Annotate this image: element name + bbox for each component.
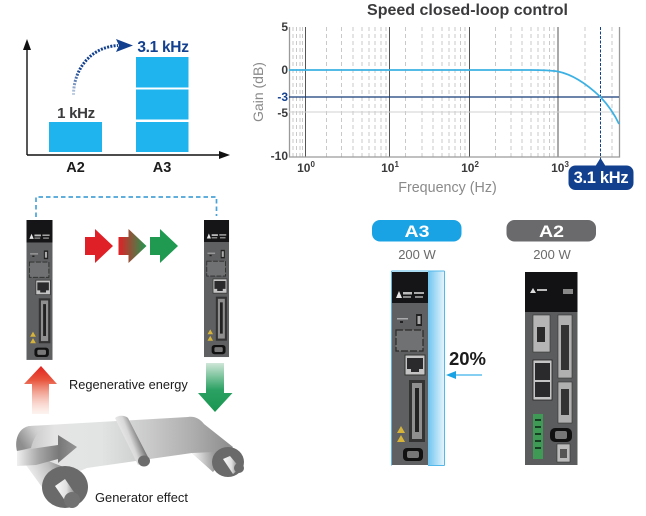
y axis labels — [271, 20, 288, 163]
diagram: regenerative energy — [16, 197, 244, 508]
badge: A3 — [372, 220, 462, 242]
lower right belt section — [192, 452, 214, 472]
minor grid lines — [293, 27, 612, 157]
bar: A2 — [49, 122, 102, 152]
y axis labels: -3 — [277, 90, 288, 104]
x axis labels: 10 — [461, 161, 474, 175]
label: Regenerative energy: Regenerative energy — [69, 377, 188, 392]
drive: A2 — [525, 272, 578, 465]
x axis labels: 10 — [551, 161, 564, 175]
panel: A3 drive — [372, 220, 486, 466]
line chart: Speed closed-loop control — [250, 2, 634, 196]
major grid lines — [306, 27, 470, 157]
x axis labels: 0 — [310, 160, 315, 169]
drive: right — [204, 220, 229, 357]
middle roller — [115, 416, 150, 466]
arrow: dotted curve — [74, 39, 133, 95]
x axis arrowhead — [219, 151, 230, 159]
right roller — [212, 447, 244, 477]
badge: A2: A2 — [539, 222, 564, 241]
y axis arrowhead — [23, 39, 31, 50]
label: 3.1 kHz: 3.1 kHz — [137, 39, 189, 56]
bars: A3 stack — [136, 57, 188, 152]
label: Generator effect: Generator effect — [95, 490, 188, 505]
x axis labels: 2 — [474, 160, 479, 169]
drive: left — [26, 220, 52, 360]
y axis title: Gain (dB) — [250, 62, 266, 122]
arrow: up red — [24, 366, 57, 414]
y axis labels: 0 — [281, 63, 288, 77]
y axis arrow — [26, 46, 28, 155]
y axis labels: -5 — [277, 106, 288, 120]
lower left belt section — [17, 453, 66, 487]
gain curve — [289, 70, 619, 124]
x axis labels — [297, 160, 569, 175]
y axis labels: -10 — [271, 149, 288, 163]
chart title: Speed closed-loop control — [367, 2, 568, 19]
x axis arrow — [27, 154, 222, 156]
left shoulder shading — [16, 425, 46, 451]
label: 20%: 20% — [449, 348, 486, 369]
label: 1 kHz: 1 kHz — [57, 105, 95, 122]
-3 dB line — [289, 96, 619, 98]
badge: A2 — [506, 220, 596, 242]
drive: A3 — [392, 272, 428, 465]
label: A3: A3 — [153, 160, 171, 176]
badge: A3: A3 — [404, 222, 430, 241]
dashed connector — [36, 197, 216, 217]
panel: A2 drive — [506, 220, 596, 465]
y axis labels: 5 — [281, 20, 288, 34]
label: 200 W: 200 W — [398, 247, 437, 262]
band edges — [392, 271, 444, 466]
left roller — [42, 466, 88, 508]
belt sheet — [16, 417, 233, 487]
width reduction band — [428, 272, 444, 465]
x axis title: Frequency (Hz) — [398, 180, 497, 196]
x axis labels: 10 — [297, 161, 310, 175]
plot frame — [290, 27, 620, 157]
x axis labels: 10 — [381, 161, 394, 175]
arrow: green — [150, 229, 178, 263]
badge: 3.1 kHz: 3.1 kHz — [574, 169, 628, 187]
label: A2: A2 — [66, 160, 85, 176]
x axis labels: 3 — [564, 160, 569, 169]
belt direction arrow — [17, 435, 77, 466]
badge: 3.1 kHz — [568, 158, 634, 190]
x axis labels: 1 — [394, 160, 399, 169]
arrow: reduction — [446, 371, 482, 379]
arrow: red to green — [118, 229, 146, 263]
arrow: red — [85, 229, 113, 263]
3.1 kHz marker line — [600, 27, 602, 160]
conveyor belt — [16, 416, 244, 508]
bar chart: A2 vs A3 bandwidth — [23, 39, 230, 176]
label: 200 W: 200 W — [533, 247, 572, 262]
arrow: down green — [198, 363, 232, 412]
-5 dB line — [289, 111, 619, 113]
